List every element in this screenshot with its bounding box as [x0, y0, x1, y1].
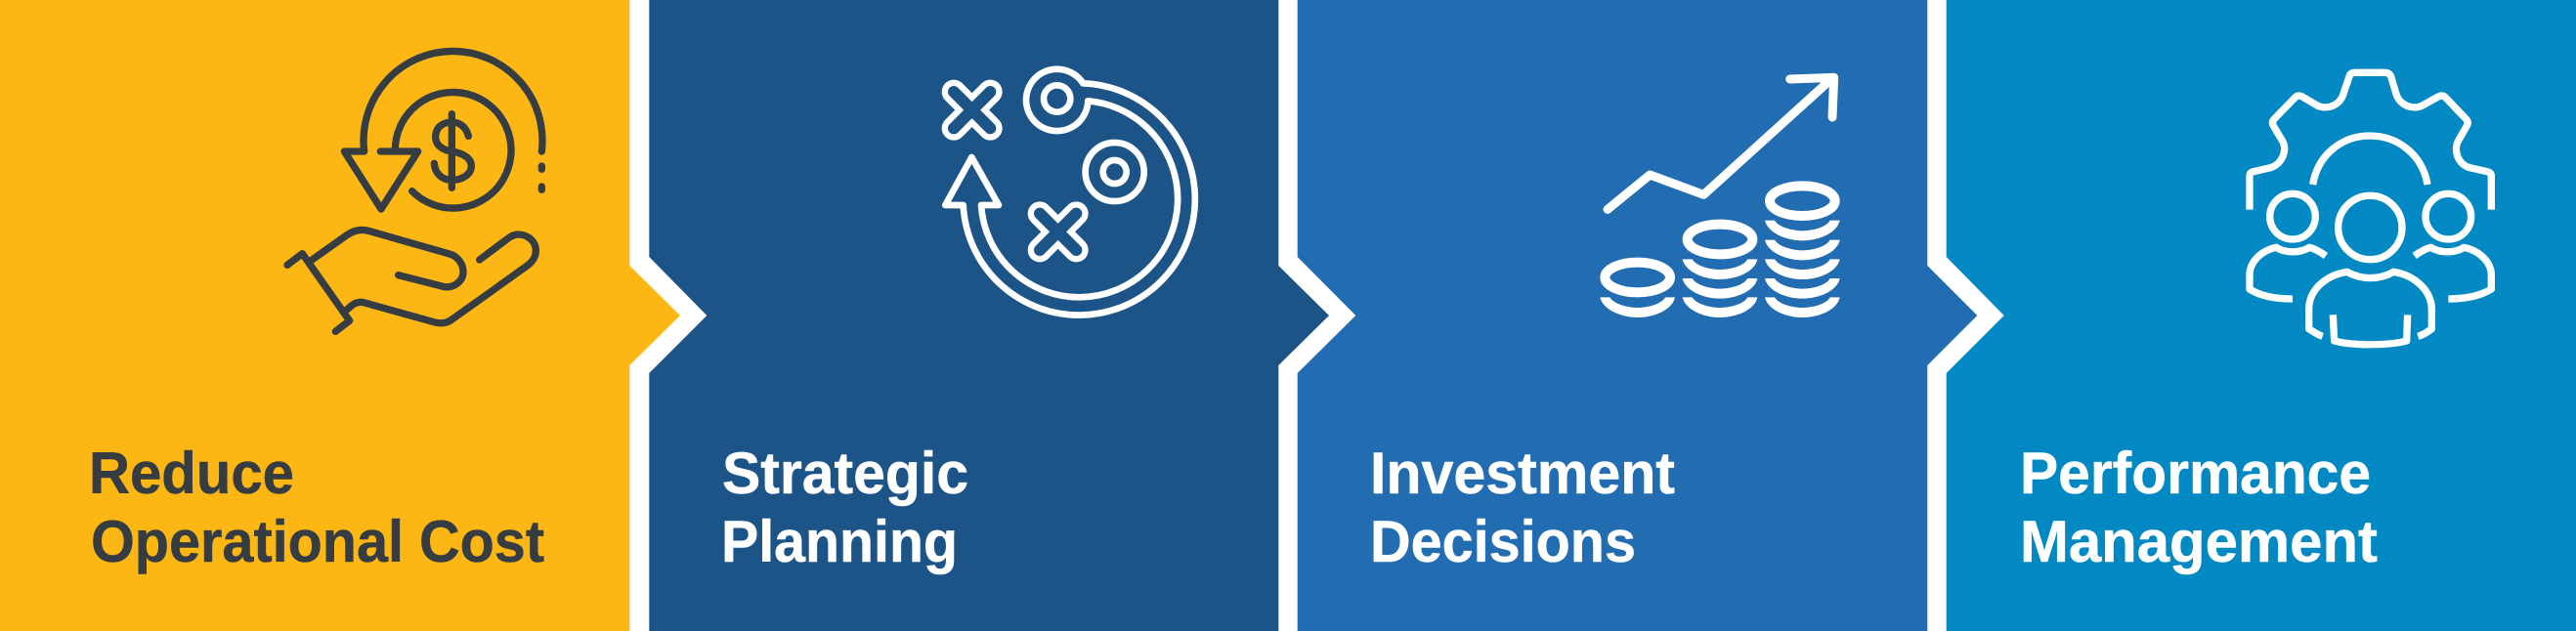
- heading: Performance Management: [2020, 441, 2378, 574]
- panel: performance management: [1947, 0, 2576, 631]
- icon: rising arrow over coin stacks: [1600, 77, 1840, 317]
- heading: Strategic Planning: Strategic: [722, 441, 968, 506]
- heading: Reduce Operational Cost: Reduce: [89, 441, 294, 506]
- panel: reduce operational cost: [0, 0, 680, 631]
- heading: Reduce Operational Cost: Operational Cost: [91, 509, 544, 574]
- panel background: yellow chevron: [0, 0, 680, 631]
- heading: Performance Management: Performance: [2020, 441, 2371, 506]
- heading: Investment Decisions: [1370, 441, 1675, 574]
- heading: Strategic Planning: Planning: [721, 509, 958, 574]
- panel background: teal-blue chevron: [1947, 0, 2576, 631]
- heading: Performance Management: Management: [2020, 509, 2378, 574]
- icon: hand with dollar coin and return arrow: [287, 51, 542, 331]
- panel background: navy chevron: [649, 0, 1329, 631]
- heading: Strategic Planning: [721, 441, 968, 574]
- heading: Investment Decisions: Decisions: [1370, 509, 1636, 574]
- heading: Reduce Operational Cost: [89, 441, 544, 574]
- heading: Investment Decisions: Investment: [1370, 441, 1675, 506]
- panel: investment decisions: [1298, 0, 1977, 631]
- icon: team of three people with gear: [2250, 72, 2491, 345]
- panel: strategic planning: [649, 0, 1329, 631]
- panel background: blue chevron: [1298, 0, 1977, 631]
- icon: strategy play diagram: [945, 69, 1195, 316]
